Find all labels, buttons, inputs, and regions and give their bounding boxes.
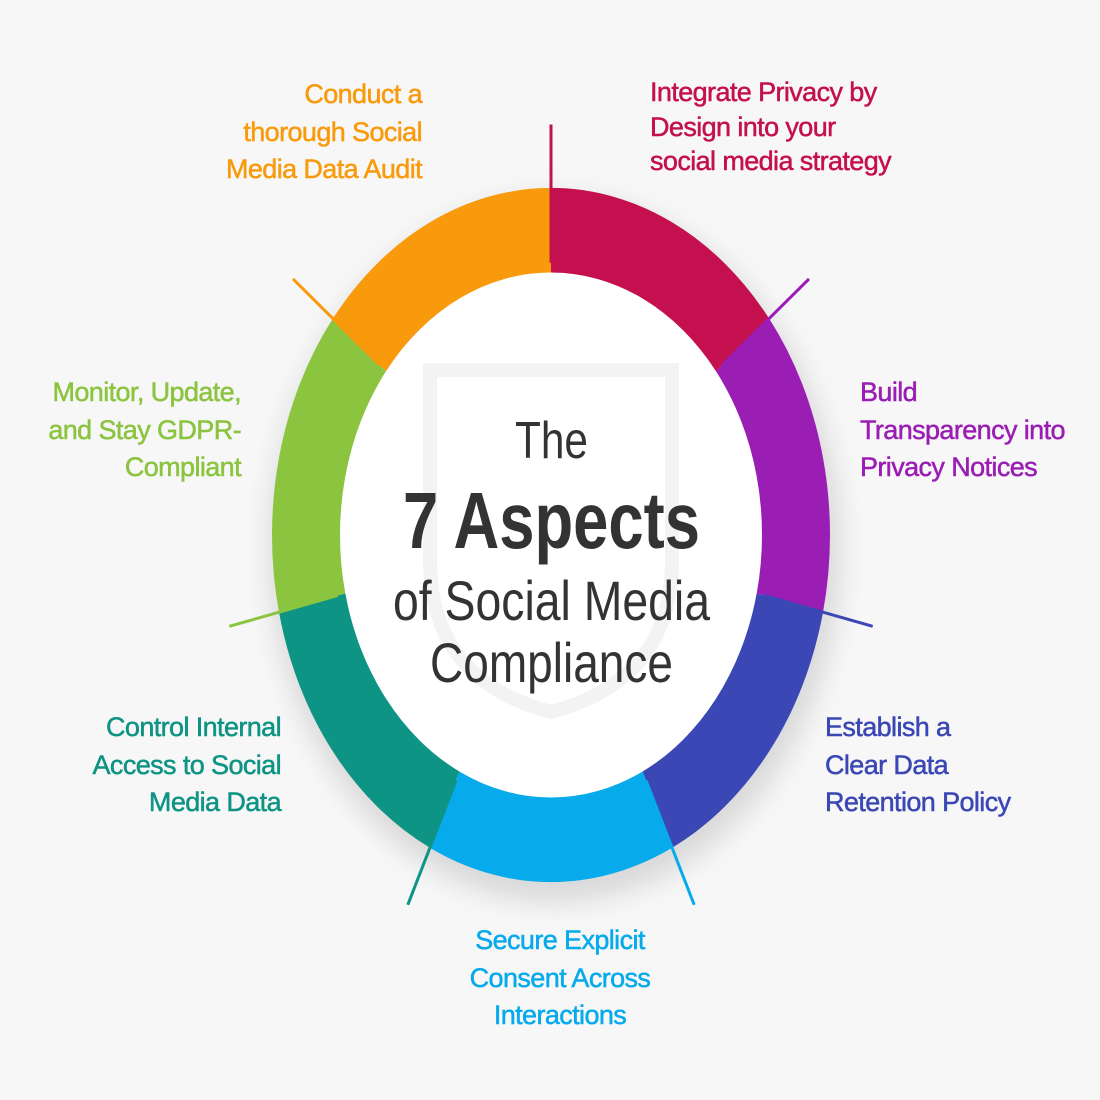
segment: purple	[716, 319, 830, 612]
center title: The	[515, 412, 588, 470]
label: orange: thorough Social	[243, 116, 422, 146]
label: orange: Media Data Audit	[226, 154, 422, 184]
label: magenta	[650, 77, 892, 176]
center title: Compliance	[430, 631, 673, 694]
segment: green	[272, 319, 386, 612]
center title	[393, 412, 711, 694]
label: indigo: Clear Data	[825, 750, 948, 780]
label: purple: Transparency into	[860, 414, 1065, 444]
label: green: Monitor, Update,	[52, 377, 241, 407]
label: teal: Media Data	[149, 787, 281, 817]
label: light blue: Interactions	[494, 1000, 626, 1030]
label: purple: Build	[860, 377, 917, 407]
label: indigo	[825, 712, 1012, 817]
label: purple	[860, 377, 1065, 482]
segment: light blue	[430, 771, 672, 882]
label: magenta: Design into your	[650, 112, 836, 142]
label: magenta: Integrate Privacy by	[650, 77, 877, 107]
segment: indigo	[643, 593, 823, 848]
center title: 7 Aspects	[403, 476, 700, 565]
label: light blue: Secure Explicit	[475, 925, 645, 955]
center title: of Social Media	[393, 569, 711, 632]
label: light blue: Consent Across	[470, 962, 650, 992]
label: purple: Privacy Notices	[860, 452, 1037, 482]
segment: magenta	[551, 188, 769, 371]
label: teal	[92, 712, 282, 817]
label: light blue	[470, 925, 650, 1030]
label: teal: Access to Social	[93, 750, 281, 780]
segment: orange	[333, 188, 551, 371]
label: teal: Control Internal	[106, 712, 281, 742]
label: magenta: social media strategy	[650, 146, 891, 176]
label: orange: Conduct a	[304, 79, 422, 109]
ticks	[229, 124, 873, 905]
label: indigo: Retention Policy	[825, 787, 1011, 817]
icon: faint shield	[430, 370, 672, 712]
segment: teal	[279, 593, 459, 848]
label: orange	[226, 79, 423, 184]
label: green	[48, 377, 242, 482]
label: green: and Stay GDPR-	[48, 414, 241, 444]
label: green: Compliant	[125, 452, 241, 482]
label: indigo: Establish a	[825, 712, 950, 742]
